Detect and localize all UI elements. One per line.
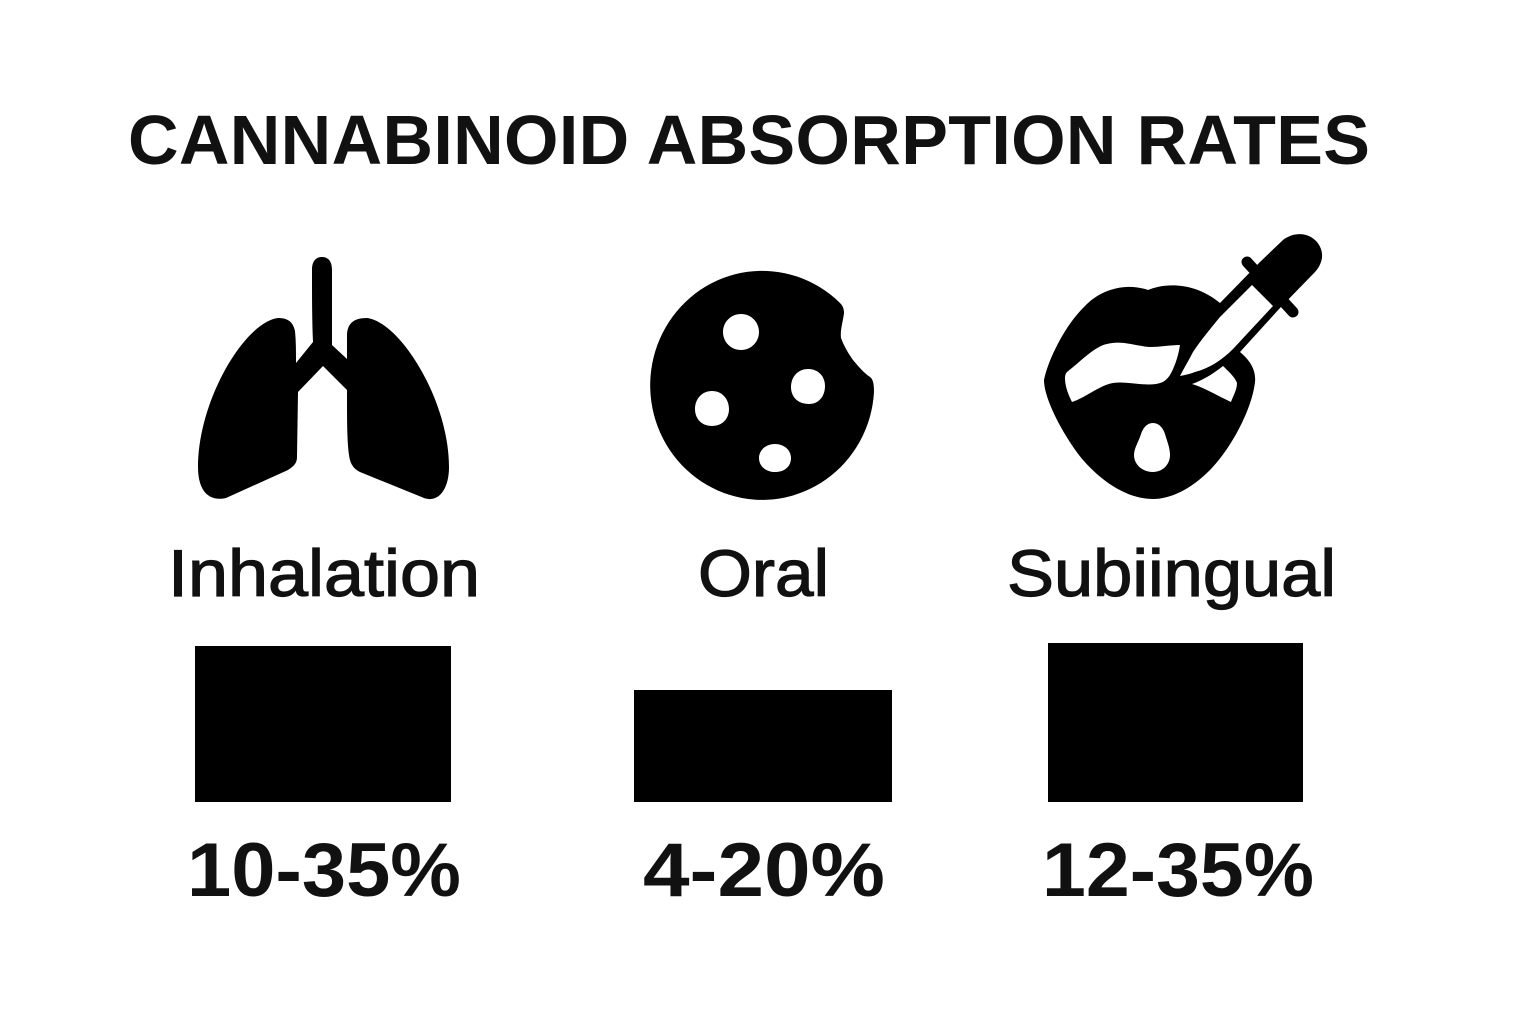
value: sublingual: 12-35% — [1042, 828, 1314, 913]
panel: sublingual — [1007, 234, 1336, 913]
label: Subiingual: Subiingual — [1007, 536, 1336, 610]
panel: inhalation — [168, 257, 480, 913]
icon: cookie — [650, 271, 874, 500]
icon: lungs — [198, 257, 449, 499]
label: Oral: Oral — [698, 536, 829, 610]
bar: inhalation — [195, 646, 451, 802]
value: oral: 4-20% — [643, 828, 885, 913]
panel: oral — [634, 271, 892, 913]
bar: sublingual — [1048, 643, 1303, 802]
icon: mouth with dropper — [1044, 234, 1322, 499]
value: inhalation: 10-35% — [187, 828, 461, 913]
title: CANNABINOID ABSORPTION RATES — [128, 101, 1370, 179]
bar: oral — [634, 690, 892, 802]
label: Inhalation: Inhalation — [168, 536, 480, 610]
